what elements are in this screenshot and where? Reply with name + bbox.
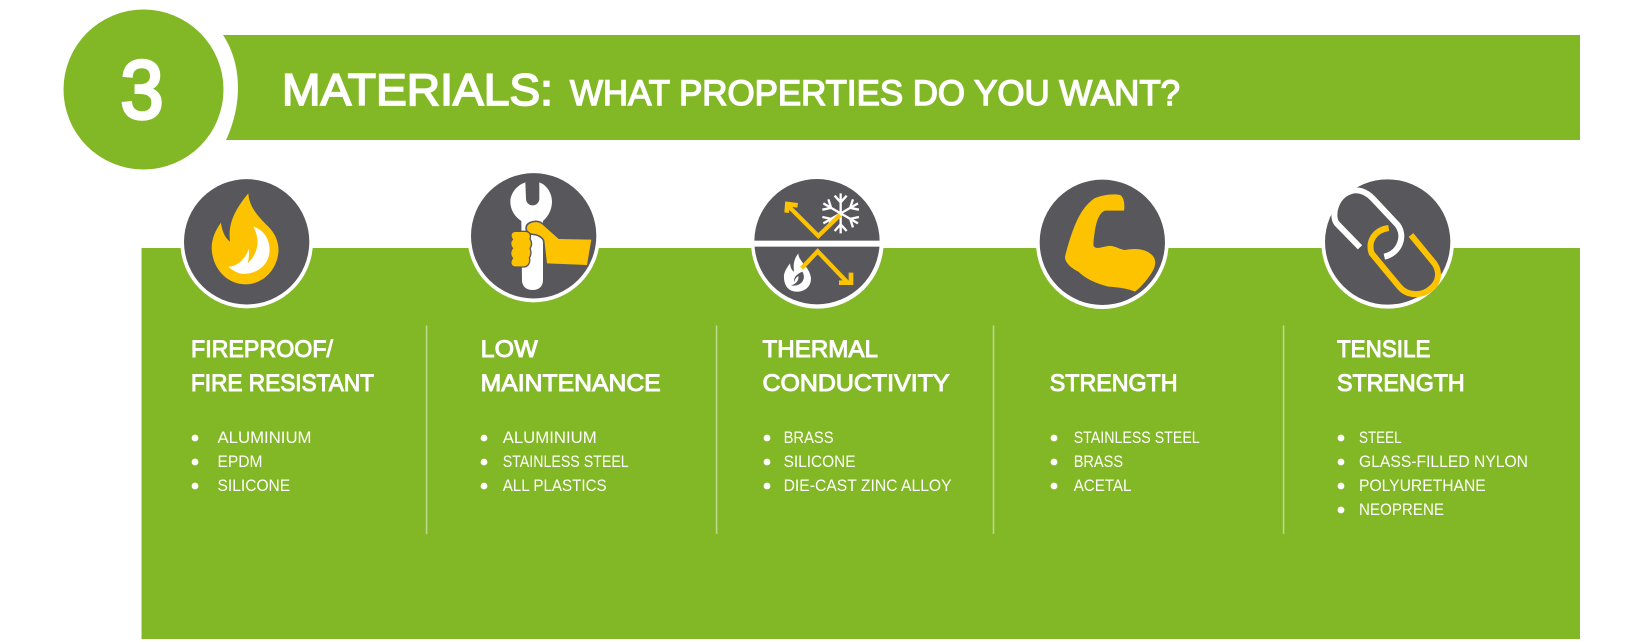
title [282,66,1180,115]
icon: hand holding wrench [467,170,600,302]
column: fireproof [191,336,374,495]
small white flame [784,253,811,292]
list: fireproof materials: SILICONE [218,476,290,495]
heading: low maintenance: MAINTENANCE [481,370,661,397]
list: tensile strength materials: POLYURETHANE [1359,476,1486,495]
heading: tensile strength: STRENGTH [1337,370,1465,397]
arrow: temperature falling from heat [802,251,851,283]
list: thermal conductivity materials [764,428,952,495]
column: tensile strength [1337,336,1528,519]
list: low maintenance materials: ALL PLASTICS [503,476,607,495]
heading: tensile strength: TENSILE [1337,336,1430,363]
title: WHAT PROPERTIES DO YOU WANT? [570,74,1180,113]
list: fireproof materials: ALUMINIUM [218,428,312,447]
heading: strength: STRENGTH [1050,370,1178,397]
list: strength materials [1051,428,1200,495]
list: low maintenance materials: STAINLESS STEEL [503,452,629,471]
icon: chain links [1321,176,1454,309]
badge: step number 3 [64,10,224,170]
icon: flame [180,176,313,308]
title: MATERIALS: [282,66,553,115]
list: tensile strength materials [1338,428,1528,519]
heading: thermal conductivity [762,336,950,397]
list: fireproof materials: EPDM [218,452,262,471]
list: low maintenance materials [481,428,629,495]
list: tensile strength materials: STEEL [1359,428,1402,447]
list: thermal conductivity materials: BRASS [784,428,834,447]
list: thermal conductivity materials: DIE-CAST ZINC ALLOY [784,476,952,495]
heading: low maintenance: LOW [481,336,539,363]
list: tensile strength materials: NEOPRENE [1359,500,1444,519]
heading: fireproof / fire resistant: FIRE RESISTANT [191,370,374,397]
list: strength materials: ACETAL [1074,476,1131,495]
heading: tensile strength [1337,336,1465,397]
column: strength [1050,370,1200,495]
badge: step number 3: 3 [120,43,164,136]
header banner [223,35,1580,140]
icon: thermal conductivity [748,176,886,309]
heading: fireproof / fire resistant: FIREPROOF/ [191,336,333,363]
list: tensile strength materials: GLASS-FILLED NYLON [1359,452,1528,471]
list: thermal conductivity materials: SILICONE [784,452,856,471]
list: low maintenance materials: ALUMINIUM [503,428,597,447]
arrow: temperature rising to cold [787,204,840,236]
list: strength materials: BRASS [1074,452,1123,471]
list: strength materials: STAINLESS STEEL [1074,428,1200,447]
panel: green content background [142,248,1580,639]
column: thermal conductivity [762,336,952,495]
icon: flexed arm [1036,176,1169,309]
column dividers [427,326,1284,534]
heading: fireproof / fire resistant [191,336,374,397]
heading: low maintenance [481,336,661,397]
snowflake [820,193,861,233]
column: low maintenance [481,336,661,495]
list: fireproof materials [192,428,312,495]
heading: thermal conductivity: CONDUCTIVITY [762,370,950,397]
heading: thermal conductivity: THERMAL [762,336,878,363]
